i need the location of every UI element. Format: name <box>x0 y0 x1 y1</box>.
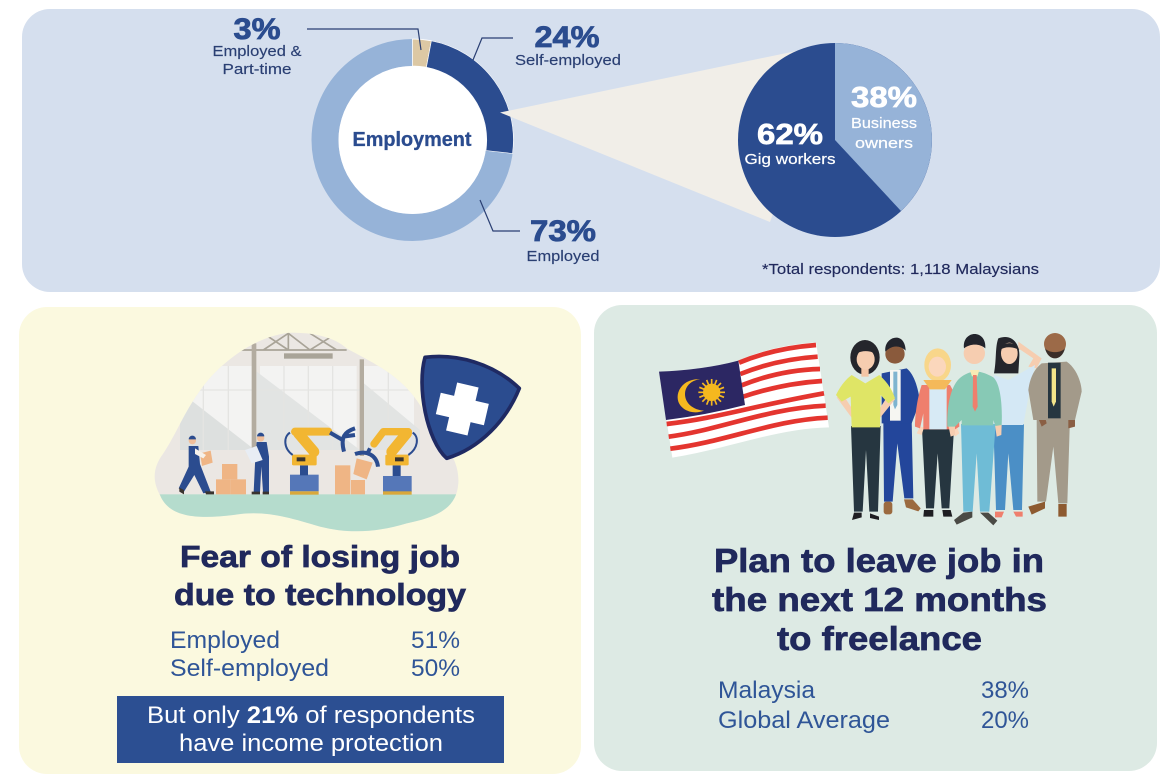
panel: plan to leave job <box>594 305 1157 771</box>
windows <box>180 366 414 450</box>
table: fear by employment type: Self-employed <box>170 655 329 682</box>
pie label: 62% gig workers: 62% <box>757 119 823 151</box>
footnote: total respondents: *Total respondents: 1,118 Malaysians <box>762 261 1039 278</box>
person: man in grey suit <box>1028 333 1082 517</box>
pie label: 62% gig workers <box>744 119 836 168</box>
cardboard boxes <box>200 451 373 494</box>
donut centre label: Employment <box>352 129 472 151</box>
heading: fear of losing job: due to technology <box>174 577 467 612</box>
callout: income protection: But only 21% of respondents <box>147 702 475 729</box>
pie label: 38% business owners <box>851 82 917 152</box>
label: 24% self-employed: 24% <box>534 21 600 54</box>
label: 3% employed and part-time <box>212 13 302 78</box>
leader lines <box>307 29 520 231</box>
panel: employment <box>22 9 1160 292</box>
label: 73% employed: 73% <box>530 215 596 248</box>
left robot arm <box>285 428 355 495</box>
table: fear by employment type: 50% <box>411 655 460 682</box>
label: 3% employed and part-time: Employed & <box>212 44 302 60</box>
person: woman in hijab <box>915 348 959 517</box>
heading: fear of losing job <box>174 539 467 612</box>
person: woman in light shirt <box>993 337 1042 517</box>
callout: income protection: have income protection <box>179 730 443 757</box>
worker carrying box <box>179 436 214 494</box>
illustration: Malaysian flag <box>659 342 829 458</box>
table: fear by employment type: 51% <box>411 627 460 654</box>
label: 24% self-employed <box>515 21 621 69</box>
illustration: six people <box>836 333 1082 525</box>
worker with clipboard <box>245 433 269 494</box>
person: woman in yellow top <box>836 340 895 520</box>
pie label: 38% business owners: owners <box>855 135 913 152</box>
heading: plan to leave job <box>712 542 1047 657</box>
right robot arm <box>355 432 417 495</box>
person: man in blue suit <box>882 338 921 514</box>
label: 73% employed <box>526 215 600 265</box>
callout: income protection <box>117 696 504 763</box>
roof truss <box>240 333 347 350</box>
table: plan by region: 38% <box>981 677 1029 704</box>
person: man in green sweater <box>947 334 1002 525</box>
heading: plan to leave job: to freelance <box>777 620 982 657</box>
heading: plan to leave job: the next 12 months <box>712 581 1047 618</box>
pie chart: self-employed breakdown <box>738 43 932 237</box>
table: plan by region: 20% <box>981 707 1029 734</box>
table: plan by region: Malaysia <box>718 677 816 704</box>
panel: fear of losing job <box>19 307 581 774</box>
label: 3% employed and part-time: 3% <box>234 13 280 46</box>
label: 3% employed and part-time: Part-time <box>222 62 292 78</box>
table: plan by region: Global Average <box>718 707 890 734</box>
heading: fear of losing job: Fear of losing job <box>180 539 460 574</box>
table: fear by employment type: Employed <box>170 627 280 654</box>
heading: plan to leave job: Plan to leave job in <box>714 542 1044 579</box>
table: plan by region <box>718 677 1029 734</box>
pie label: 62% gig workers: Gig workers <box>744 151 836 168</box>
label: 24% self-employed: Self-employed <box>515 53 621 69</box>
pie label: 38% business owners: 38% <box>851 82 917 114</box>
table: fear by employment type <box>170 627 460 682</box>
icon: shield with cross <box>422 356 519 458</box>
donut chart: employment <box>325 39 835 228</box>
label: 73% employed: Employed <box>526 249 600 265</box>
illustration: factory with workers and robot arms <box>154 332 458 532</box>
pie label: 38% business owners: Business <box>851 115 917 132</box>
